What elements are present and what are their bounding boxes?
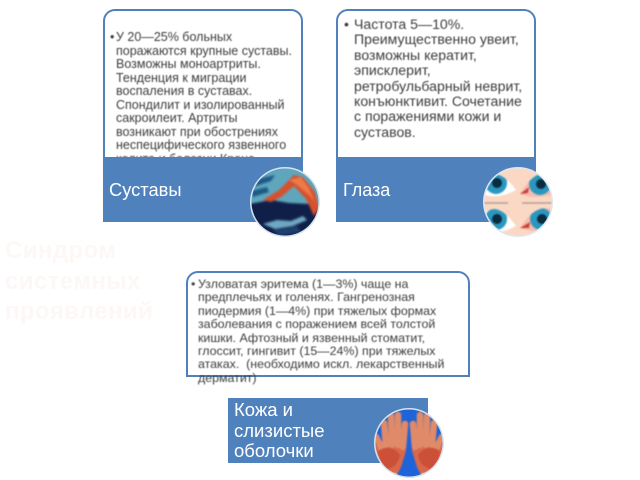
skin text block: глоссит, гингивит (15—24%) при тяжелых	[198, 344, 435, 358]
eyes text block: Преимущественно увеит,	[354, 31, 519, 47]
panel: joints	[103, 9, 320, 237]
icon: joints x-ray	[250, 167, 320, 237]
skin text block: атаках. (необходимо искл. лекарственный	[198, 357, 444, 371]
skin text block: •	[191, 277, 195, 291]
joints text block	[110, 30, 292, 157]
eyes text block: •	[344, 16, 349, 32]
joints text block: Возможны моноартриты.	[116, 57, 261, 71]
joints text block: сакроилеит. Артриты	[116, 111, 237, 125]
eyes text block	[344, 16, 522, 141]
panel: eyes	[336, 9, 553, 237]
joints text block: У 20—25% больных	[116, 30, 232, 44]
skin text block: заболевания с поражением всей толстой	[198, 317, 435, 331]
skin label bar	[228, 398, 428, 463]
eyes text block: возможны кератит,	[354, 47, 477, 63]
joints text block: Тенденция к миграции	[116, 70, 246, 84]
skin heading: оболочки	[234, 440, 314, 461]
skin heading: Кожа и	[234, 399, 293, 420]
heading: faint title	[5, 237, 153, 325]
skin text card	[186, 271, 470, 377]
skin text block: предплечьях и голенях. Гангренозная	[198, 290, 415, 304]
joints text block: неспецифического язвенного	[116, 138, 286, 152]
eyes text block: ретробульбарный неврит,	[354, 78, 522, 94]
skin text block: дерматит)	[198, 371, 257, 385]
joints text card	[103, 9, 303, 159]
joints text block: Спондилит и изолированный	[116, 98, 285, 112]
skin text block	[190, 277, 444, 386]
eyes text card	[336, 9, 536, 159]
joints text block: •	[110, 30, 114, 44]
skin text block: Узловатая эритема (1—3%) чаще на	[198, 277, 408, 291]
eyes text block: конъюнктивит. Сочетание	[354, 93, 522, 109]
joints text block: поражаются крупные суставы.	[116, 44, 292, 58]
eyes text block: эписклерит,	[354, 62, 431, 78]
eyes text block: с поражениями кожи и	[354, 108, 501, 124]
skin text block: пиодермия (1—4%) при тяжелых формах	[198, 304, 436, 318]
joints heading: Суставы	[109, 179, 181, 200]
panel: skin and mucosa	[186, 271, 470, 478]
icon: hands	[374, 408, 444, 478]
joints text block: воспаления в суставах.	[116, 84, 252, 98]
eyes text block: суставов.	[354, 124, 416, 140]
eyes heading: Глаза	[343, 180, 390, 200]
heading: faint title: проявлений	[5, 298, 153, 325]
skin heading	[234, 399, 325, 461]
icon: eyes	[483, 167, 553, 237]
heading: faint title: Синдром	[5, 237, 116, 264]
heading: faint title: системных	[5, 268, 141, 294]
eyes label bar	[336, 157, 536, 222]
eyes text block: Частота 5—10%.	[354, 16, 464, 32]
skin text block: кишки. Афтозный и язвенный стоматит,	[198, 331, 425, 345]
joints label bar	[103, 157, 303, 222]
skin heading: слизистые	[234, 420, 325, 440]
joints text block: возникают при обострениях	[116, 124, 278, 138]
